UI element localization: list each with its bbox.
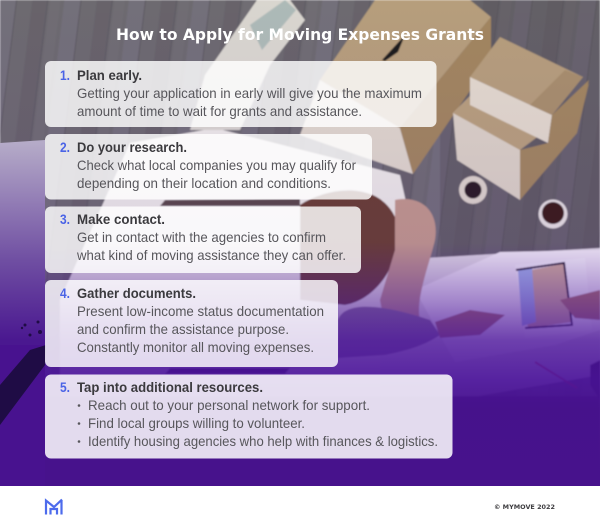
card 1: plan early: amount of time to wait for grants and assistance. (77, 103, 362, 119)
big box (320, 0, 491, 128)
woman (300, 190, 398, 305)
papers (415, 250, 600, 362)
card 2: do your research: 2. (60, 139, 70, 155)
card 2: do your research (45, 134, 372, 200)
ink brush strokes (0, 320, 46, 425)
card 4: gather documents (45, 280, 338, 367)
card 5: additional resources: Find local groups willing to volunteer. (88, 415, 305, 431)
card 2: do your research: depending on their location and conditions. (77, 175, 331, 191)
card 3: make contact: what kind of moving assistance they can offer. (76, 247, 346, 263)
card 1: plan early: 1. (60, 67, 70, 83)
stacked boxes (453, 96, 520, 200)
card 5: additional resources (45, 374, 452, 458)
card 1: plan early (45, 61, 436, 127)
card 1: plan early: Getting your application in early will give you the maximum (77, 85, 422, 101)
surface and floor bottom (380, 248, 600, 400)
card 3: make contact: Get in contact with the agencies to confirm (77, 229, 326, 245)
card 3: make contact: 3. (60, 211, 70, 227)
card 5: additional resources: Reach out to your personal network for support. (88, 397, 370, 413)
card 4: gather documents: Constantly monitor all moving expenses. (77, 339, 314, 355)
title: How to Apply for Moving Expenses Grants (116, 25, 484, 44)
card 4: gather documents: Gather documents. (77, 285, 196, 301)
card 2: do your research: Check what local companies you may qualify for (77, 157, 356, 173)
mugs (459, 176, 487, 204)
card 5: additional resources: Tap into additional resources. (77, 379, 263, 395)
card 1: plan early: Plan early. (77, 67, 142, 83)
card 5: additional resources: Identify housing agencies who help with finances & logistics. (88, 433, 438, 449)
pencil and dark object (535, 362, 577, 388)
copyright: © MYMOVE 2022 (494, 503, 555, 511)
footer bar (0, 486, 600, 528)
card 5: additional resources: 5. (60, 379, 70, 395)
card 4: gather documents: and confirm the assistance purpose. (77, 321, 289, 337)
icon: MyMove logo (46, 500, 62, 514)
card 3: make contact: Make contact. (77, 211, 165, 227)
card 4: gather documents: 4. (60, 285, 70, 301)
rug roll and white sheet behind the cards (60, 128, 420, 400)
card 2: do your research: Do your research. (77, 139, 187, 155)
card 3: make contact (45, 206, 361, 273)
card 4: gather documents: Present low-income status documentation (77, 303, 324, 319)
pale wall at left (0, 140, 45, 345)
